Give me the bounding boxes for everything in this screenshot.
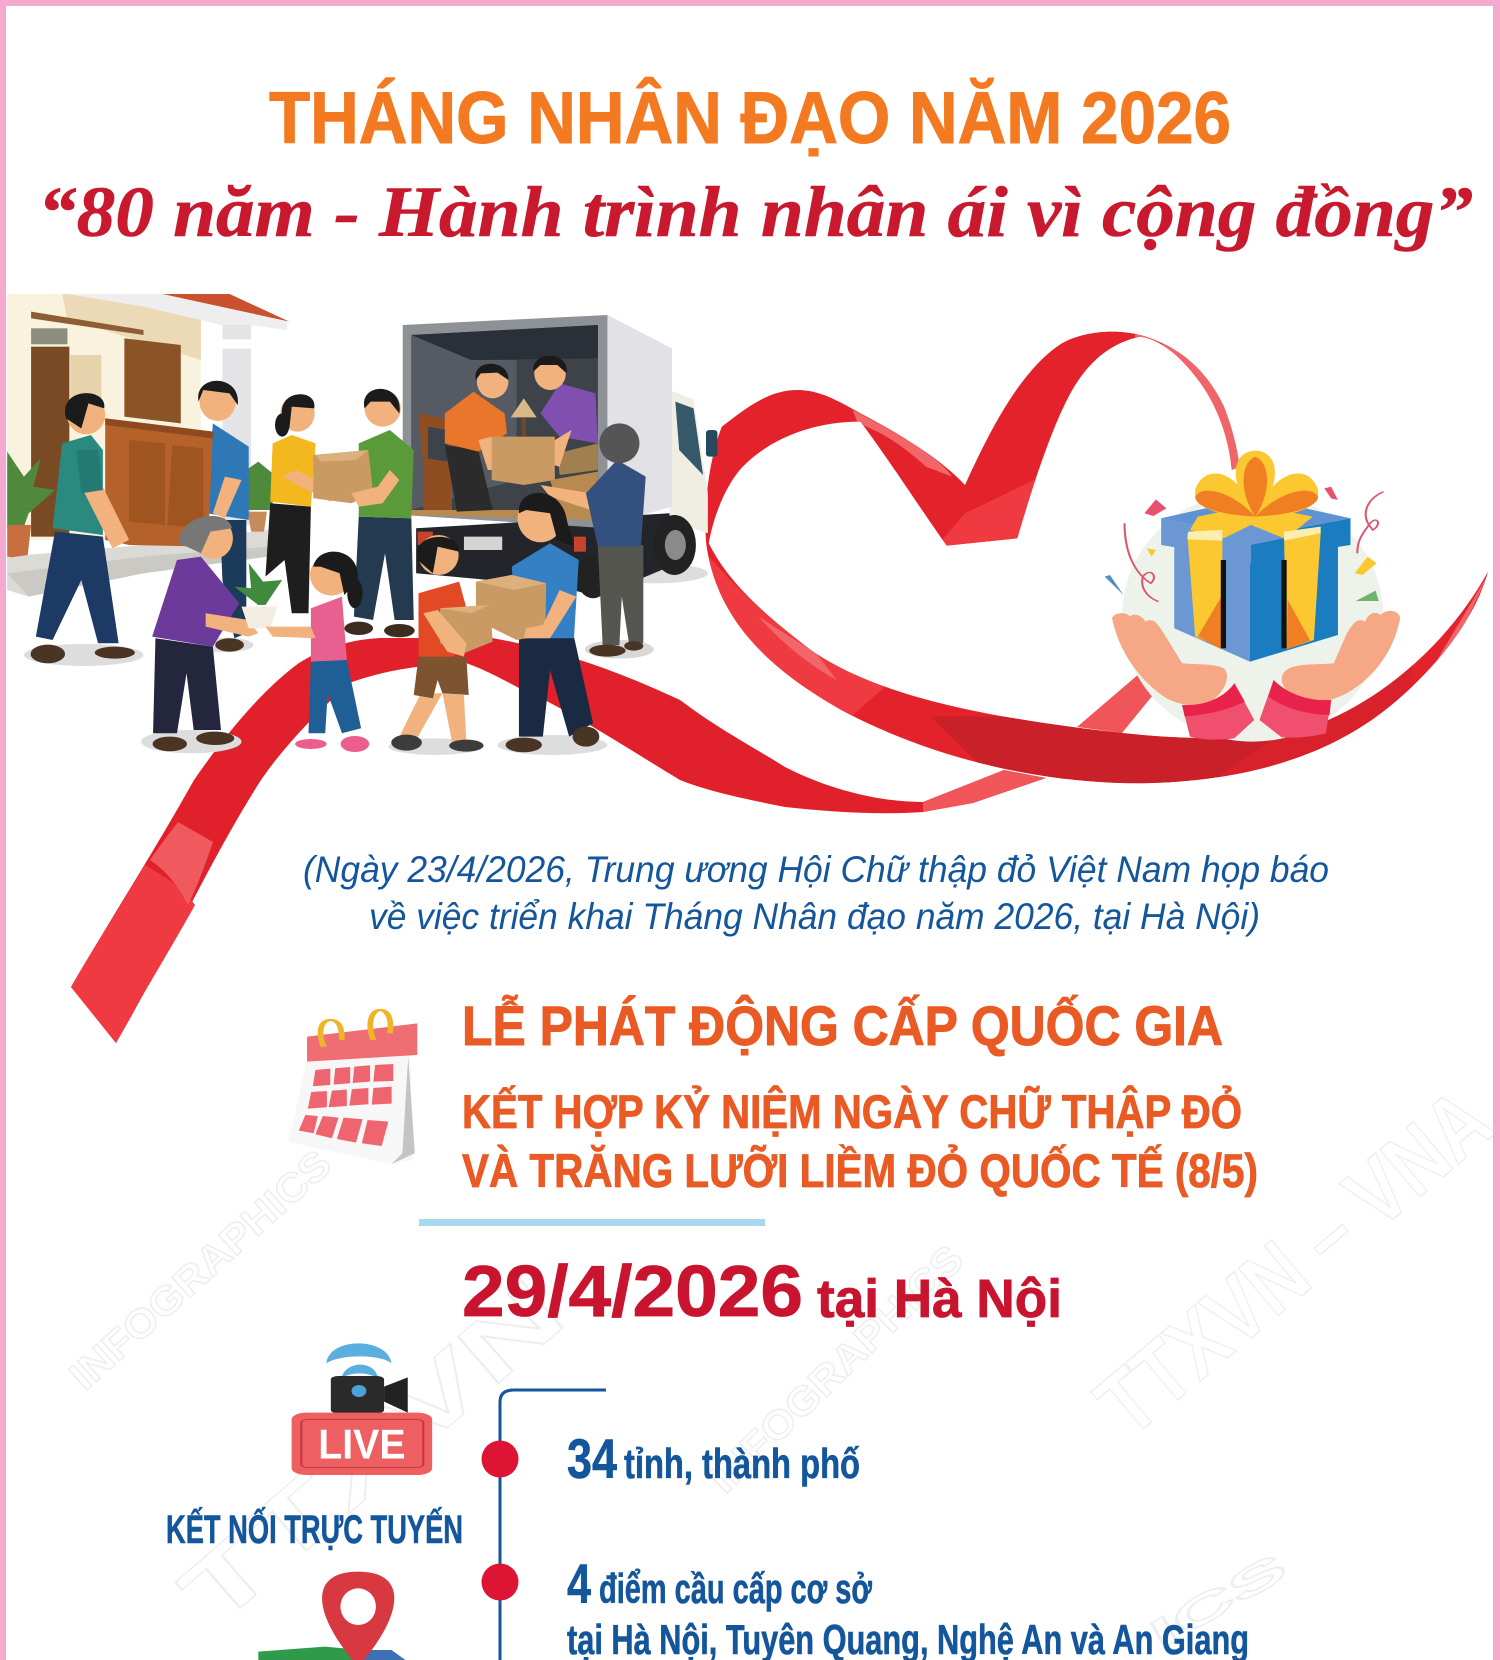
caption: về việc triển khai Tháng Nhân đạo năm 2026, tại Hà Nội): [369, 896, 1260, 937]
icon: live camera: [292, 1343, 432, 1475]
open hands: [1112, 611, 1400, 740]
woman in yellow shirt: [265, 394, 340, 613]
house: [7, 294, 289, 597]
confetti: [1105, 487, 1383, 602]
item: 34 provinces: 34: [567, 1427, 617, 1490]
ribbon bow: [1195, 451, 1318, 517]
man in purple shirt: [533, 356, 598, 475]
gift box: [1161, 505, 1350, 662]
icon: calendar: [289, 1010, 417, 1164]
timeline: [482, 1390, 606, 1660]
truck: [403, 315, 717, 598]
item: 4 local connection points: điểm cầu cấp cơ sở: [599, 1565, 872, 1612]
caption: (Ngày 23/4/2026, Trung ương Hội Chữ thập đỏ Việt Nam họp báo: [303, 849, 1329, 890]
illustration: volunteers helping a family move: [7, 294, 717, 755]
box between adults: [313, 450, 399, 507]
man in green shirt: [344, 389, 415, 637]
boy in red shirt: [388, 535, 484, 755]
watermarks: TTXVN: [163, 1261, 583, 1645]
label: online connection: KẾT NỐI TRỰC TUYẾN: [166, 1506, 463, 1552]
girl in pink: [265, 552, 369, 752]
date and place: tại Hà Nội: [817, 1269, 1062, 1329]
item: 34 provinces: tỉnh, thành phố: [624, 1440, 860, 1487]
icon: live camera: LIVE: [318, 1421, 406, 1468]
watermarks: ICS: [1142, 1545, 1294, 1658]
item: 34 provinces: [567, 1427, 860, 1490]
man in blue shirt behind cabinet: [196, 381, 253, 652]
subtitle slogan: “80 năm - Hành trình nhân ái vì cộng đồng”: [38, 172, 1473, 252]
watermarks: [62, 1070, 1500, 1658]
item: 4 local connection points: 4: [567, 1552, 591, 1615]
grandmother in purple: [141, 516, 258, 753]
date and place: 29/4/2026: [462, 1252, 803, 1332]
man in orange shirt: [445, 364, 508, 512]
icon: gift box in open hands: [1105, 451, 1400, 742]
watermarks: INFOGRAPHICS: [701, 1237, 972, 1501]
boxes in truck: [492, 437, 555, 485]
icon: map pin: [258, 1572, 410, 1660]
date and place: [462, 1252, 1062, 1332]
caption: [303, 849, 1329, 937]
title: THÁNG NHÂN ĐẠO NĂM 2026: [269, 78, 1231, 159]
cardboard boxes carried by children: [423, 575, 576, 657]
man in teal shirt: [24, 393, 143, 666]
red ribbon heart: [696, 332, 1491, 800]
wooden cabinet: [105, 418, 213, 547]
sub-heading: VÀ TRĂNG LƯỠI LIỀM ĐỎ QUỐC TẾ (8/5): [462, 1144, 1258, 1197]
man in navy shirt at truck: [540, 423, 654, 659]
plants by the door: [7, 452, 273, 557]
heading: national launching ceremony: LỄ PHÁT ĐỘNG CẤP QUỐC GIA: [462, 994, 1223, 1057]
woman in blue shirt: [497, 493, 607, 755]
watermarks: INFOGRAPHICS: [62, 1142, 340, 1399]
item: 4 local connection points: [567, 1552, 1249, 1660]
sub-heading: KẾT HỢP KỶ NIỆM NGÀY CHỮ THẬP ĐỎ: [462, 1085, 1242, 1138]
chair and lamp: [419, 398, 537, 510]
sub-heading: [462, 1085, 1258, 1197]
red ribbon lower strand and tail: [71, 638, 1153, 1043]
potted plant held by grandmother and girl: [234, 563, 282, 628]
